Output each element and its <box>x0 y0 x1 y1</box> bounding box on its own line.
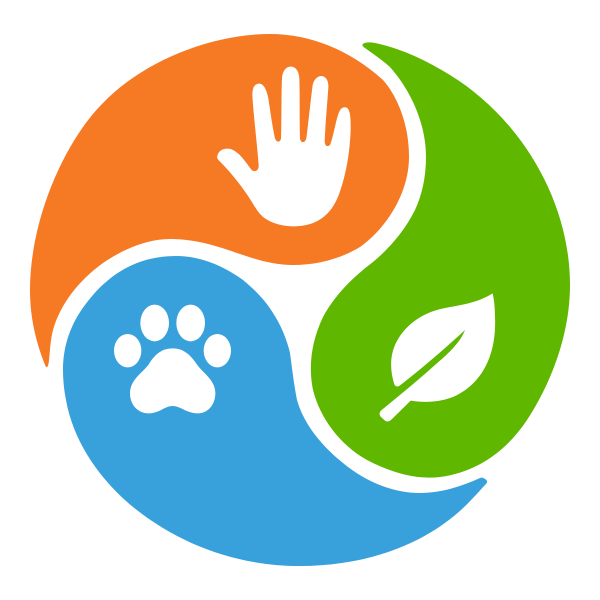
panel: green swirl segment <box>311 42 570 478</box>
icon: hand <box>217 67 351 226</box>
panel: blue swirl segment <box>63 256 487 566</box>
panel: orange swirl segment <box>30 34 409 367</box>
icon: leaf <box>380 293 495 422</box>
icon: paw print <box>114 305 231 413</box>
